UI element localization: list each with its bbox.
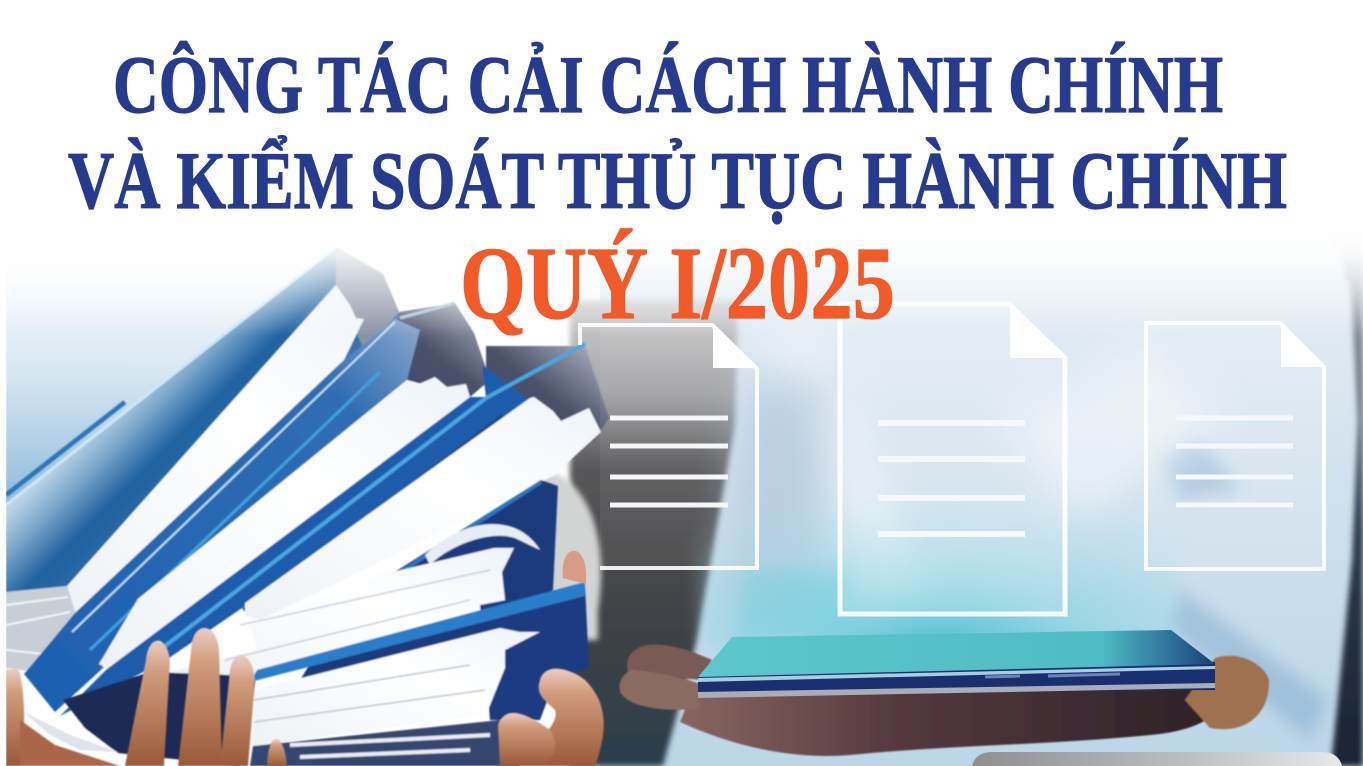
icon: smartphone <box>698 630 1215 698</box>
icon: centre document <box>840 302 1067 614</box>
cyan glow from phone <box>700 450 1180 650</box>
top white fade <box>0 228 1363 336</box>
finger behind folder <box>563 551 586 584</box>
background: person in shirt and suit <box>520 230 1363 766</box>
title <box>68 39 1287 341</box>
paper stack 5 <box>253 628 540 746</box>
paper 1 <box>67 285 364 613</box>
folder 2 inner <box>368 303 490 397</box>
crumpled sheet <box>24 712 118 752</box>
bottom-right rounded tab <box>972 752 1342 766</box>
icon: hand holding phone <box>620 645 1269 756</box>
folder 1 spine <box>24 303 455 712</box>
paper 2 <box>99 377 470 669</box>
icon: hands holding folders <box>6 628 604 766</box>
paper 3 <box>245 397 601 620</box>
navy behind fingers <box>63 672 256 766</box>
folder 5 <box>250 582 589 766</box>
folder 4 <box>170 480 558 680</box>
paper stack 4 <box>170 548 514 680</box>
panel: blue folders with papers <box>6 247 609 766</box>
icon: left document <box>580 323 759 568</box>
pale background behind folders <box>6 247 336 503</box>
title line 3: quarter: QUÝ I/2025 <box>460 226 895 341</box>
left margin <box>0 225 6 766</box>
icon: right document <box>1146 322 1326 569</box>
folder 1 cover <box>6 247 399 640</box>
paper stack block at far left <box>6 586 75 674</box>
clean white header band <box>0 0 1363 229</box>
folder 2 spine <box>60 344 585 716</box>
folder 3 inner <box>486 346 609 442</box>
